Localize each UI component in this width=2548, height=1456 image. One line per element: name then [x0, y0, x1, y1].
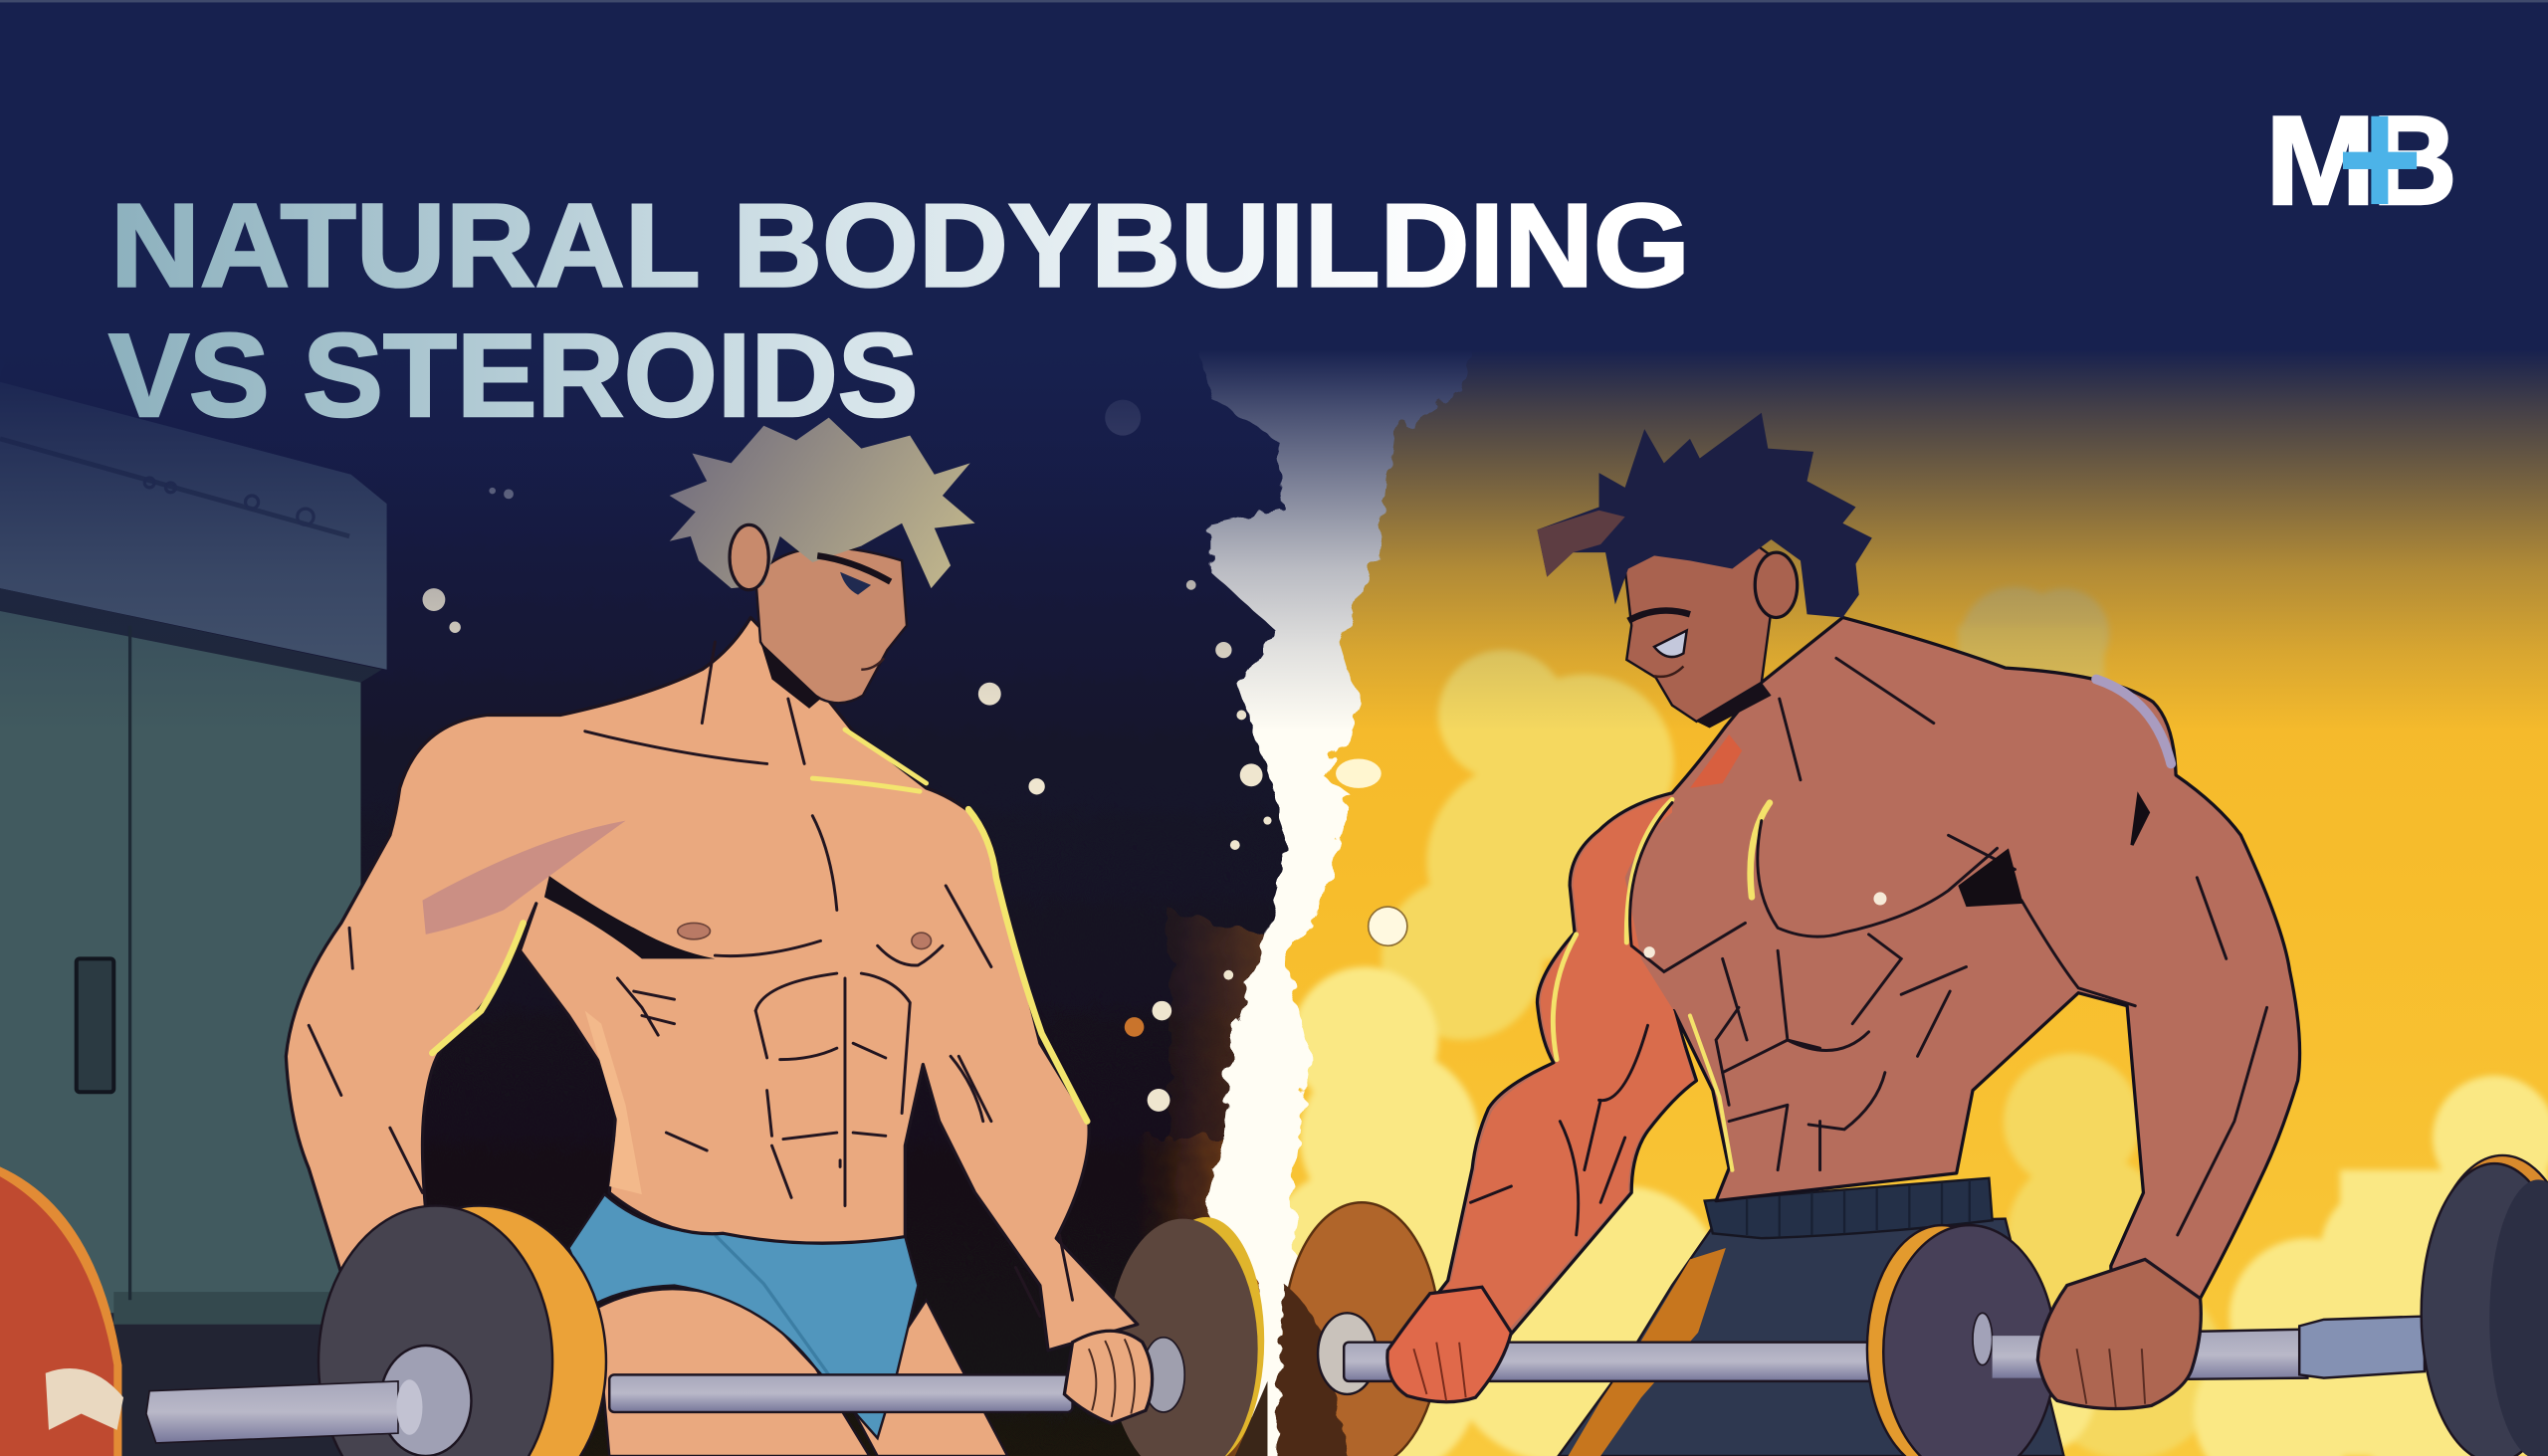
yellow rim light	[432, 729, 1087, 1122]
barbell: steroid side	[1318, 1155, 2548, 1456]
pants	[1559, 1178, 2063, 1456]
panel: steroid side yellow background	[1251, 333, 2548, 1456]
main plate	[1867, 1225, 2057, 1456]
red plate	[0, 1166, 123, 1456]
trunks	[568, 1194, 918, 1438]
title: NATURAL BODYBUILDING	[110, 179, 1690, 312]
rim lights	[1553, 680, 2171, 1170]
muscle shadow	[422, 821, 626, 935]
far plate: natural side	[1108, 1217, 1267, 1456]
title: VS STEROIDS	[108, 310, 918, 442]
nipples	[678, 923, 932, 949]
bar	[609, 1374, 1073, 1412]
logo: MB with medical cross: M	[2265, 90, 2376, 231]
barbell: natural side	[0, 1166, 1184, 1456]
black underarm line	[544, 876, 715, 958]
ear	[730, 524, 768, 590]
icon: cabinet handle	[77, 958, 113, 1092]
hub and hand	[1064, 1331, 1184, 1423]
main plate	[146, 1206, 606, 1456]
head	[670, 418, 975, 709]
eye	[1628, 611, 1690, 657]
eye	[817, 555, 891, 595]
figure: natural bodybuilder	[286, 418, 1138, 1456]
far plate: steroid side	[1276, 1202, 1440, 1456]
black armpit	[1958, 848, 2023, 907]
hub	[1318, 1313, 1377, 1394]
logo: MB with medical cross: B	[2373, 90, 2457, 231]
panel: natural side dark background	[0, 325, 1407, 1456]
torso and arms	[286, 617, 1138, 1351]
panel: gym cabinet	[0, 382, 387, 1456]
highlights	[1643, 892, 1887, 958]
hair	[670, 418, 975, 588]
title	[108, 179, 1690, 442]
clouds	[1381, 586, 2223, 1456]
panel: central light streak	[1122, 325, 1475, 1456]
muscle lines	[1471, 658, 2267, 1235]
hands	[1387, 1259, 2201, 1409]
head	[1537, 413, 1872, 728]
muscle lines	[309, 642, 1073, 1317]
bar	[1344, 1317, 2425, 1381]
depth fade overlay	[0, 0, 2548, 731]
end plate	[2422, 1155, 2548, 1456]
lit arm	[1417, 796, 1693, 1361]
legs	[596, 1289, 1007, 1456]
spark: right side bubbles	[1336, 759, 1407, 945]
sparks	[422, 400, 1272, 1112]
figure: steroid bodybuilder	[1413, 413, 2300, 1456]
torso and arms	[1413, 617, 2300, 1365]
logo: MB with medical cross	[2265, 90, 2457, 231]
hair	[1537, 413, 1872, 617]
